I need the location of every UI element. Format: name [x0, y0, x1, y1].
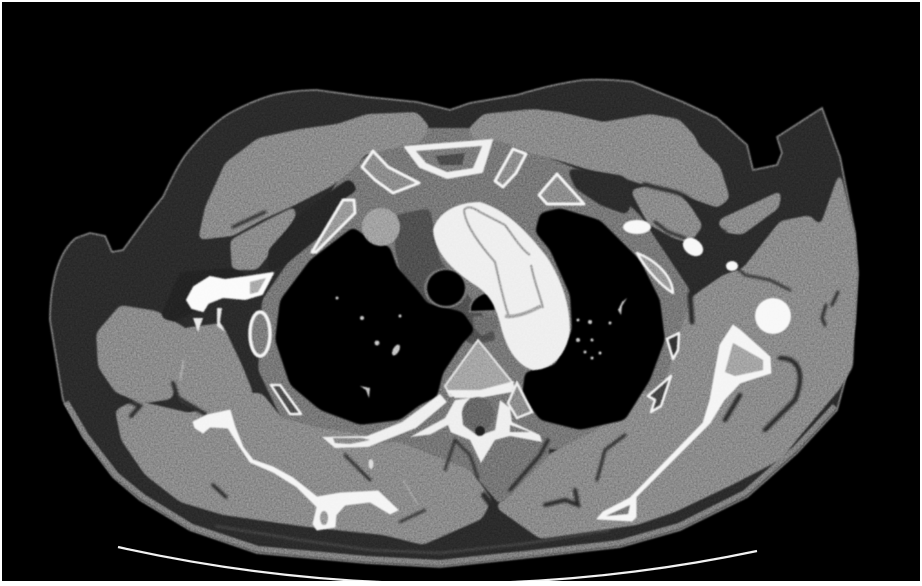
- scanner table: [118, 547, 757, 584]
- left subclavian artery: [362, 208, 400, 246]
- muscles and chest wall: [96, 109, 858, 545]
- right axillary vessels: [623, 220, 791, 334]
- right scapula: [597, 325, 771, 521]
- muscle: right shoulder and back: [495, 170, 858, 539]
- mediastinum: [395, 208, 498, 345]
- sternum: [405, 140, 492, 178]
- muscle: left pectoralis minor: [230, 206, 296, 270]
- left lung: [275, 227, 475, 425]
- body outline with skin and subcutaneous fat: [50, 80, 858, 567]
- posterior skin band: [66, 402, 835, 563]
- muscle: left infraspinatus and back: [115, 393, 492, 545]
- clavicles and anterior ribs: [250, 149, 679, 414]
- fat streaks between muscles: [122, 184, 838, 522]
- muscle: right pectoralis minor: [630, 185, 703, 243]
- lung vessels: [336, 296, 627, 398]
- muscle: right lateral slip: [718, 190, 782, 235]
- posterior fascia line: [215, 526, 610, 553]
- right lateral ribs: [637, 253, 673, 293]
- thoracic vertebra and posterior ribs: [322, 340, 542, 505]
- muscle: right pectoralis major: [467, 109, 730, 208]
- muscle: left pectoralis major: [198, 112, 430, 240]
- trachea: [424, 268, 498, 336]
- muscle: left deltoid: [96, 305, 189, 404]
- muscle: left subscapularis: [172, 323, 254, 414]
- calcified subclavian graft: [180, 273, 273, 380]
- right lung: [522, 208, 665, 430]
- esophagus: [473, 316, 498, 336]
- chest wall ring: [258, 128, 690, 450]
- left scapula: [193, 410, 398, 530]
- axillary fat: [160, 268, 250, 322]
- right fat planes: [567, 168, 633, 215]
- aortic arch with dissection flap: [433, 202, 570, 370]
- soft tissue around spine: [330, 395, 550, 505]
- left fat planes: [268, 178, 358, 272]
